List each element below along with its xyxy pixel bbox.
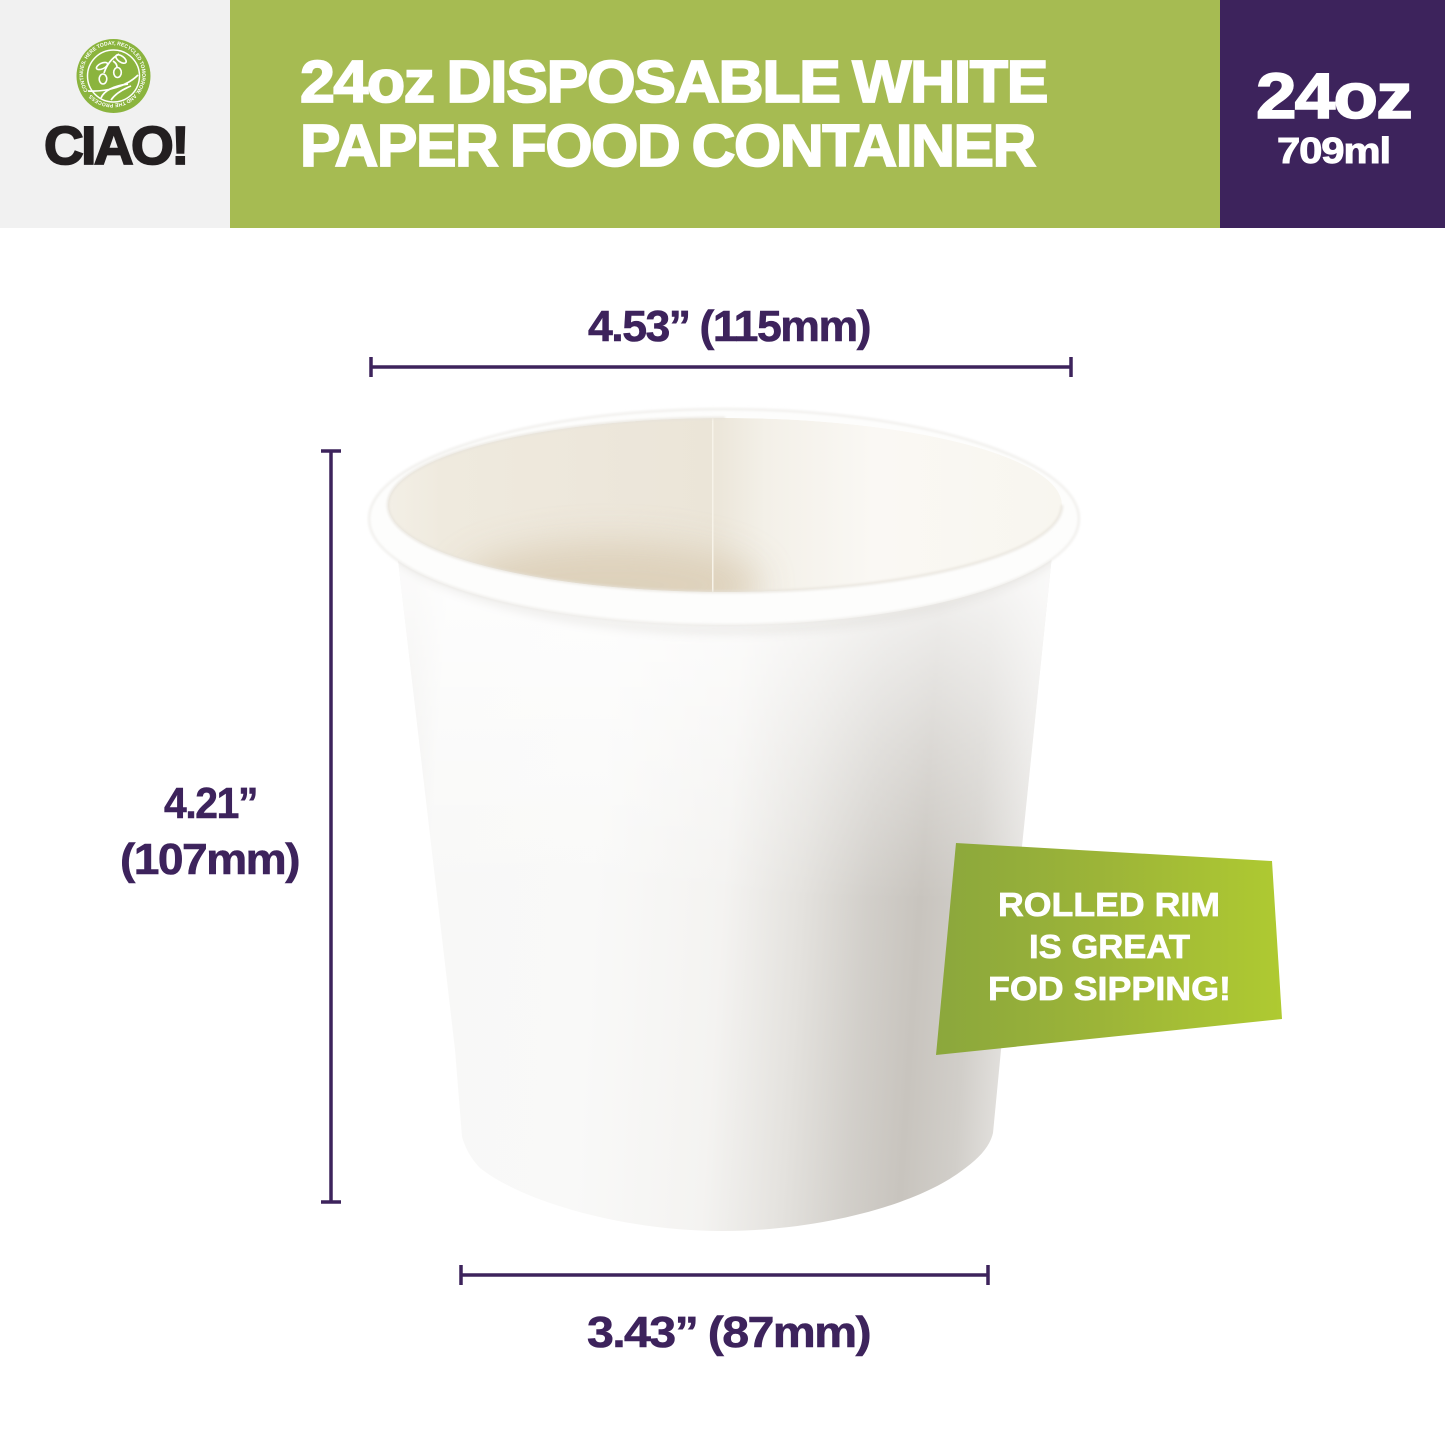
cup body — [398, 560, 1052, 1231]
header: capacity badge: 24oz — [1256, 60, 1411, 132]
height dimension: 4.21” — [164, 779, 257, 828]
callout: rolled rim: FOD SIPPING! — [988, 970, 1231, 1007]
height dimension: (107mm) — [120, 835, 299, 884]
callout: rolled rim: IS GREAT — [1029, 928, 1190, 965]
top width dimension — [371, 302, 1071, 377]
bottom width dimension: 3.43” (87mm) — [587, 1308, 870, 1357]
callout: rolled rim — [936, 843, 1282, 1055]
bottom width dimension — [461, 1265, 988, 1357]
header: capacity badge — [1220, 0, 1445, 228]
logo wordmark: CIAO! — [44, 116, 187, 176]
product: white paper cup — [369, 409, 1079, 1240]
callout: rolled rim: ROLLED RIM — [998, 886, 1220, 923]
top width dimension: 4.53” (115mm) — [588, 302, 870, 351]
cup interior — [388, 418, 1062, 592]
title — [300, 49, 1047, 179]
icon: recycled olive badge: CONTINUES. HERE TODAY, RECYCLED TOMORROW. AND THE PROCESS — [79, 41, 146, 108]
title: 24oz DISPOSABLE WHITE — [300, 49, 1047, 115]
header: logo panel — [0, 0, 230, 228]
height dimension — [120, 451, 341, 1202]
header: capacity badge: 709ml — [1277, 130, 1390, 171]
title: PAPER FOOD CONTAINER — [300, 113, 1036, 179]
rolled rim — [369, 409, 1079, 625]
header: title band — [230, 0, 1220, 228]
